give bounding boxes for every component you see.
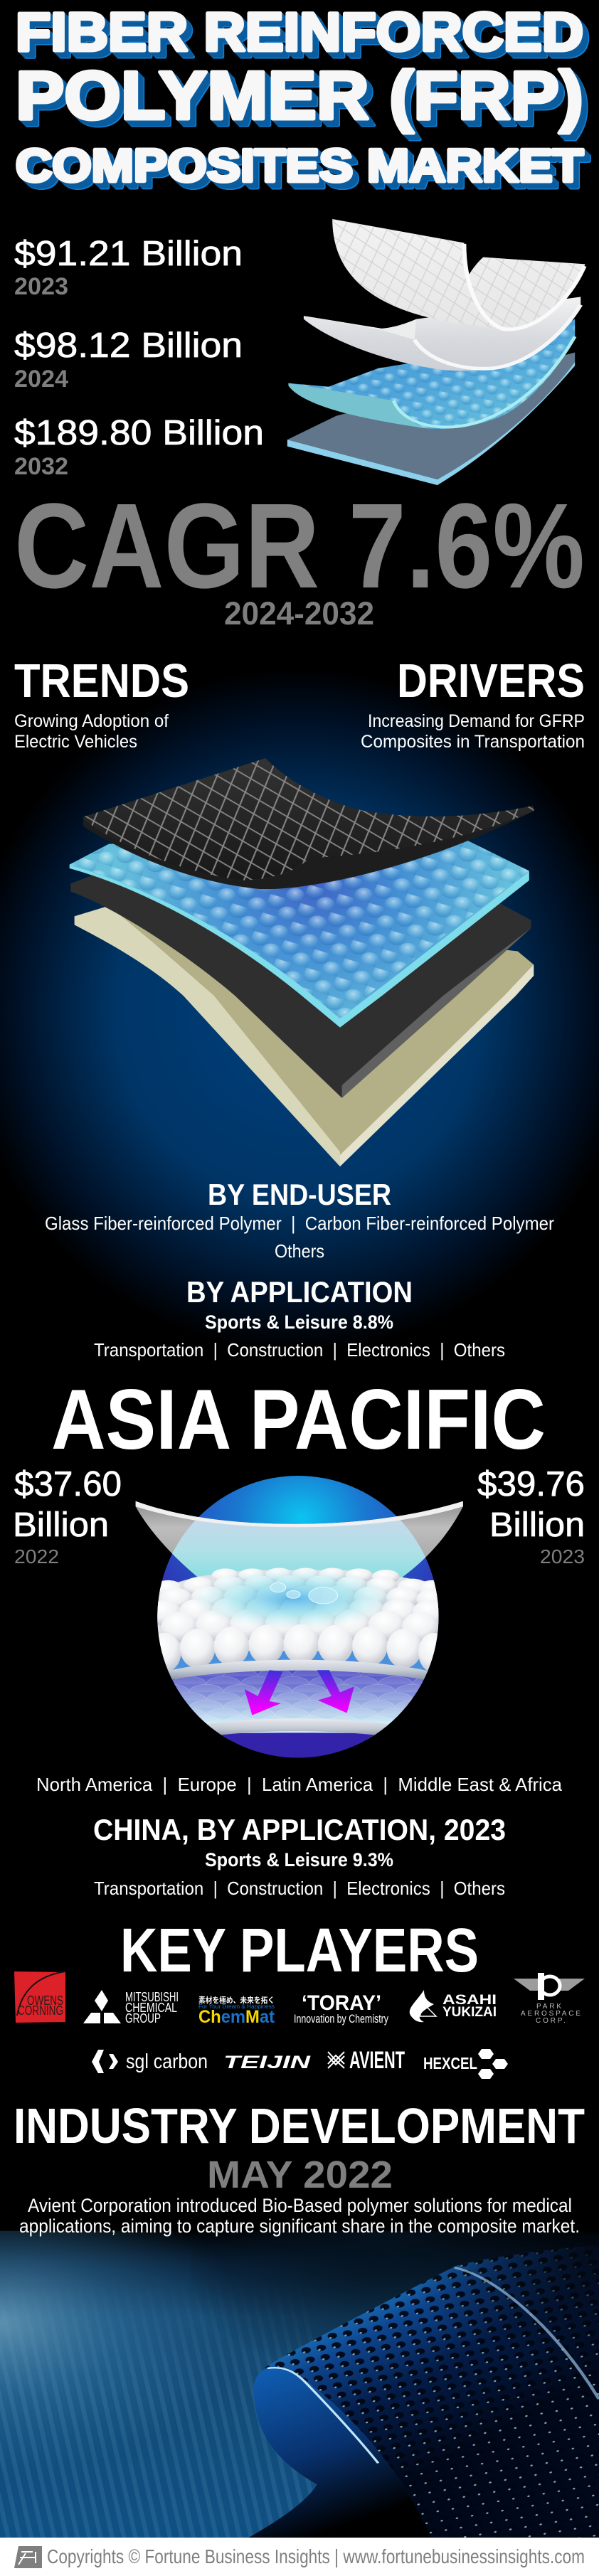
clipped interior	[157, 1516, 438, 1758]
top white lattice sheet	[332, 219, 585, 330]
logo: Owens Corning: CORNING	[18, 2003, 63, 2018]
logo: Avient	[328, 2047, 405, 2074]
logo: SGL Carbon: sgl carbon	[126, 2050, 208, 2073]
Asia Pacific 2022 value: 2022	[14, 1545, 59, 1568]
end-user heading: BY END-USER	[208, 1178, 391, 1211]
trends text: Electric Vehicles	[14, 732, 137, 752]
black layer	[70, 875, 531, 1098]
logo: Toray	[294, 1991, 388, 2026]
bottom fill	[219, 1733, 377, 1758]
value 2024: $98.12 Billion	[14, 326, 243, 365]
trends text: Growing Adoption of	[14, 711, 169, 731]
logo: Asahi Yukizai	[410, 1990, 497, 2022]
wet zone tint	[199, 1570, 390, 1627]
industry development	[14, 2098, 585, 2216]
year 2023: 2023	[14, 273, 68, 300]
footer logo	[14, 2546, 42, 2568]
sheet inner side	[248, 2366, 432, 2538]
logo: ChemMat: ChemMat	[198, 2007, 275, 2027]
logo: Hexcel	[423, 2049, 508, 2079]
by end-user	[45, 1178, 554, 1262]
upper cup outside	[136, 1501, 463, 1578]
Asia Pacific 2022 value: $37.60	[14, 1465, 122, 1503]
logo: Park Aerospace: AEROSPACE	[521, 2010, 581, 2018]
application share: Sports & Leisure 8.8%	[205, 1311, 393, 1333]
water droplets	[270, 1582, 338, 1604]
illustration: layered sheets top	[287, 219, 585, 485]
Asia Pacific 2023 value	[477, 1465, 585, 1568]
logo: Teijin: TEIJIN	[223, 2053, 311, 2072]
China segments: Transportation | Construction | Electronics | Others	[94, 1878, 505, 1899]
other regions: North America | Europe | Latin America | Middle East & Africa	[36, 1774, 563, 1795]
logo: Park Aerospace	[514, 1973, 585, 2025]
Asia Pacific heading: ASIA PACIFIC	[51, 1372, 546, 1467]
trends heading: TRENDS	[14, 654, 189, 708]
lower band	[206, 1718, 388, 1735]
drivers text: Composites in Transportation	[361, 732, 585, 752]
title: FIBER REINFORCED	[16, 2, 583, 63]
logo: Toray: Innovation by Chemistry	[294, 2012, 388, 2026]
logo: ChemMat: 素材を極め、未来を拓く	[198, 1995, 275, 2005]
application segments: Transportation | Construction | Electronics | Others	[94, 1339, 505, 1361]
trends text	[14, 711, 169, 752]
sheet holes	[264, 2245, 599, 2538]
drivers text	[361, 711, 585, 752]
title	[16, 2, 583, 191]
industry date: MAY 2022	[207, 2154, 393, 2196]
logo: ChemMat	[198, 1995, 275, 2027]
arrow right	[317, 1670, 354, 1713]
logo: Hexcel: HEXCEL	[423, 2054, 477, 2072]
blue bubble layer	[70, 841, 529, 1028]
ball field base	[153, 1570, 443, 1661]
logo: Park Aerospace: CORP.	[536, 2017, 566, 2025]
image dark top	[191, 2231, 599, 2373]
China by application	[93, 1813, 506, 1899]
Asia Pacific 2022 value: Billion	[13, 1506, 109, 1544]
image stripes	[0, 2348, 312, 2538]
sheet bright edge	[267, 2368, 378, 2463]
year 2032: 2032	[14, 453, 68, 480]
sheet top-right shade	[382, 2235, 599, 2368]
logo: Park Aerospace: PARK	[536, 2003, 561, 2011]
title: COMPOSITES MARKET	[16, 139, 583, 191]
logo: Mitsubishi Chemical Group: CHEMICAL	[125, 2001, 177, 2015]
logo: Asahi Yukizai: YUKIZAI	[442, 2005, 497, 2020]
image base	[0, 2231, 599, 2538]
illustration: absorbent layers sphere	[136, 1476, 463, 1759]
year 2024: 2024	[14, 366, 68, 393]
logo: Mitsubishi Chemical Group: MITSUBISHI	[125, 1990, 179, 2004]
end-user others: Others	[275, 1240, 324, 1262]
key players heading: KEY PLAYERS	[120, 1916, 479, 1985]
blue bubble sheet	[288, 319, 575, 429]
perforated material image	[0, 2231, 599, 2538]
drivers text: Increasing Demand for GFRP	[368, 711, 585, 731]
carbon top layer	[83, 758, 534, 880]
value 2032: $189.80 Billion	[14, 414, 264, 452]
Asia Pacific 2023 value: $39.76	[477, 1465, 585, 1503]
cream layer	[75, 906, 534, 1166]
logo: Asahi Yukizai: ASAHI	[442, 1993, 497, 2008]
second edge	[455, 2267, 599, 2399]
blue gaps under balls	[153, 1651, 443, 1673]
image glow	[0, 2231, 599, 2538]
logo: Avient: AVIENT	[349, 2047, 405, 2074]
logo: ChemMat: For Your Dream & Happiness	[198, 2003, 275, 2010]
title: POLYMER (FRP)	[16, 58, 583, 134]
logo: Mitsubishi Chemical Group	[83, 1990, 179, 2026]
Asia Pacific 2023 value: 2023	[540, 1545, 585, 1568]
upper cup inside	[172, 1516, 425, 1577]
by application	[94, 1275, 505, 1361]
China heading: CHINA, BY APPLICATION, 2023	[93, 1813, 506, 1846]
China share: Sports & Leisure 9.3%	[205, 1849, 393, 1870]
Asia Pacific 2023 value: Billion	[489, 1506, 585, 1544]
logo: SGL Carbon	[92, 2050, 208, 2073]
illustration: composite layers	[70, 758, 534, 1166]
application heading: BY APPLICATION	[186, 1275, 413, 1309]
blue radial glow	[0, 661, 599, 1358]
drivers block	[361, 654, 585, 752]
trends block	[14, 654, 189, 752]
upper cup rim	[136, 1501, 463, 1527]
sphere	[157, 1476, 438, 1757]
bottom grey sheet	[287, 353, 575, 479]
lower purple layer	[169, 1670, 427, 1740]
arrow left	[245, 1670, 282, 1715]
CAGR period: 2024-2032	[224, 595, 374, 632]
lower scale texture	[173, 1670, 427, 1727]
Asia Pacific 2022 value	[13, 1465, 122, 1568]
ball rows	[147, 1568, 447, 1642]
logo: Mitsubishi Chemical Group: GROUP	[125, 2011, 161, 2026]
market values	[14, 235, 264, 480]
end-user segments: Glass Fiber-reinforced Polymer | Carbon Fiber-reinforced Polymer	[45, 1213, 554, 1234]
perforated sheet	[264, 2245, 599, 2538]
white middle sheet	[304, 297, 581, 371]
footer bar	[0, 2538, 599, 2576]
value 2023: $91.21 Billion	[14, 235, 243, 273]
logo: Owens Corning	[14, 1971, 65, 2023]
front ball row	[147, 1624, 449, 1672]
middle band	[164, 1660, 432, 1681]
logo: Toray: ‘TORAY’	[302, 1991, 381, 2015]
logo: Owens Corning: OWENS	[27, 1994, 63, 2008]
